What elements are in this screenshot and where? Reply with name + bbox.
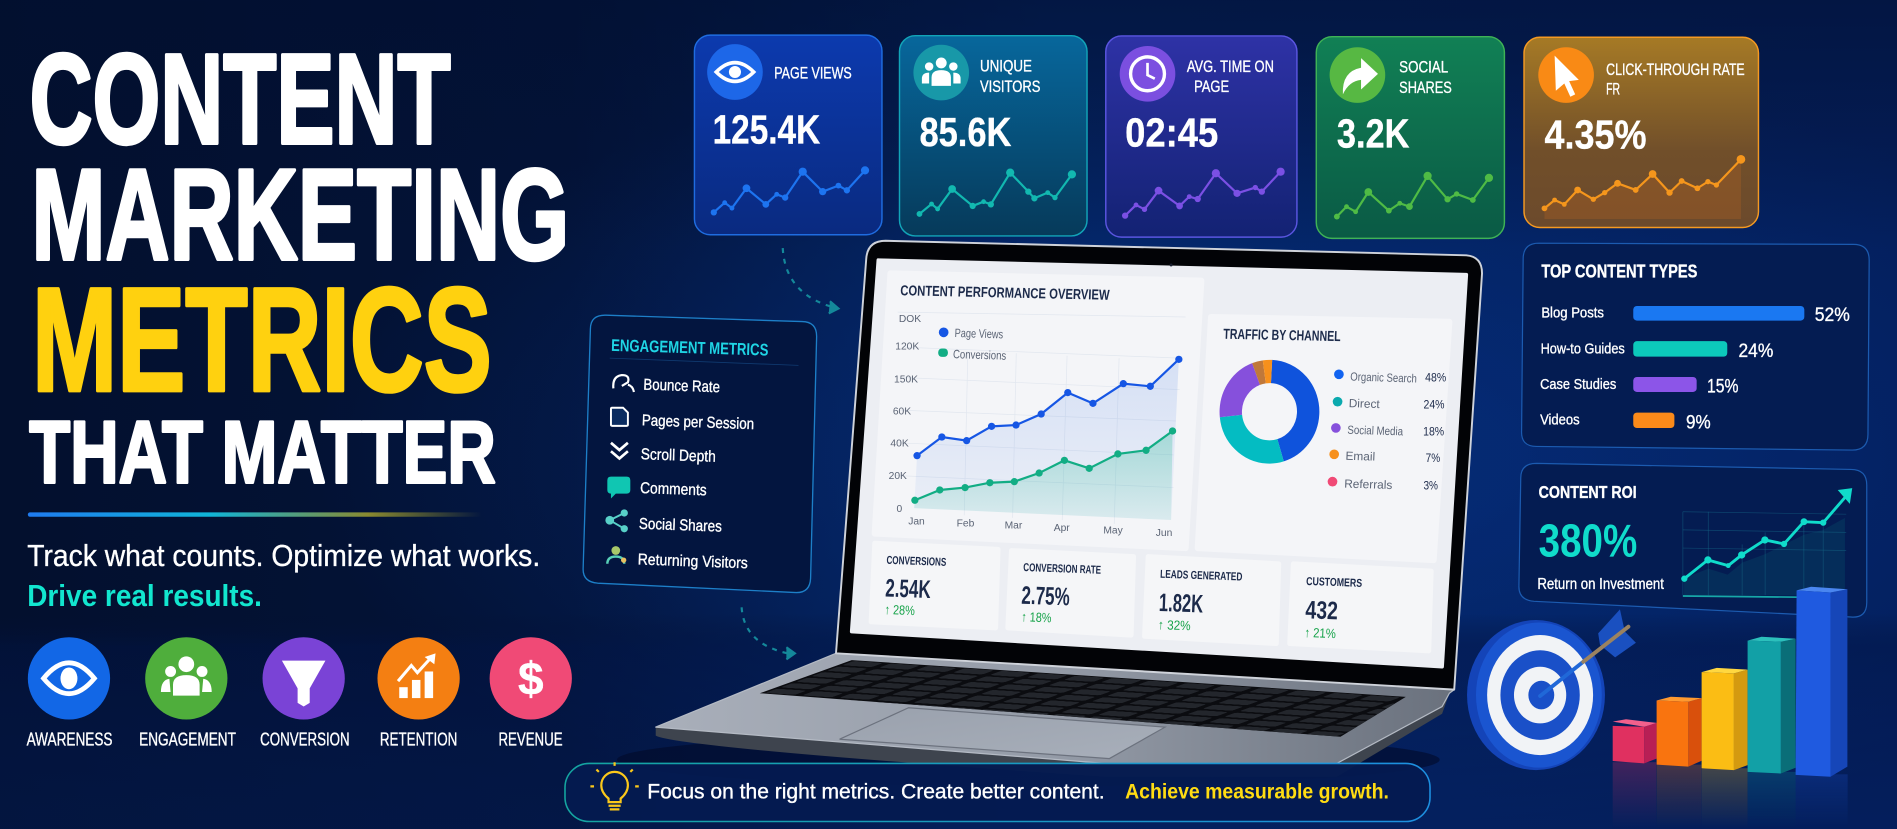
- chart axis labels: 20K: [889, 471, 907, 482]
- KPI card: page views: [694, 35, 882, 235]
- chart axis labels: 40K: [890, 438, 909, 449]
- KPI card: click-through rate: CLICK-THROUGH RATE: [1606, 61, 1745, 79]
- stat card: conversions: ↑ 28%: [884, 602, 915, 618]
- row: bounce rate: [613, 375, 720, 396]
- stat card: conversion rate: [1008, 550, 1134, 635]
- donut legend: 7%: [1426, 451, 1441, 465]
- tagline: [27, 540, 540, 613]
- bar: videos: 9%: [1686, 411, 1711, 433]
- arrow: engagement to laptop: [742, 607, 795, 659]
- bar: case studies: [1540, 376, 1739, 398]
- KPI card: average time on page: PAGE: [1194, 78, 1229, 96]
- bar: orange: [1657, 697, 1702, 767]
- bar: blog posts: Blog Posts: [1541, 305, 1604, 322]
- bar: blue: [1796, 587, 1847, 777]
- chart axis labels: 60K: [893, 406, 911, 417]
- donut legend: Email: [1345, 449, 1375, 464]
- stat card: conversion rate: ↑ 18%: [1021, 609, 1052, 625]
- row: scroll depth: [611, 443, 716, 466]
- title: METRICS: [32, 258, 492, 423]
- KPI card: average time on page: 02:45: [1125, 109, 1218, 155]
- donut legend: Direct: [1348, 396, 1381, 411]
- donut legend: 3%: [1423, 478, 1438, 492]
- funnel stage: conversion: [260, 637, 350, 749]
- row: social shares: Social Shares: [639, 516, 722, 536]
- line: page views: [913, 356, 1182, 459]
- row: scroll depth: Scroll Depth: [640, 446, 716, 466]
- KPI card: click-through rate: FR: [1606, 80, 1620, 98]
- row: returning visitors: [607, 546, 748, 572]
- donut legend: Social Media: [1347, 423, 1404, 438]
- chart axis labels: Feb: [957, 518, 975, 529]
- stat card: conversions: CONVERSIONS: [886, 555, 947, 569]
- funnel stage: retention: RETENTION: [380, 729, 457, 749]
- bar: blog posts: 52%: [1815, 304, 1850, 326]
- KPI card: click-through rate: [1524, 37, 1758, 227]
- panel: top content types: [1522, 243, 1869, 450]
- stat card: leads generated: ↑ 32%: [1158, 617, 1191, 633]
- panel: content ROI: Return on Investment: [1537, 576, 1665, 593]
- laptop lid: [836, 241, 1482, 690]
- stat card: leads generated: LEADS GENERATED: [1160, 569, 1243, 584]
- row: bounce rate: Bounce Rate: [643, 377, 720, 396]
- panel: engagement metrics: [583, 315, 817, 593]
- target with arrow: [1467, 609, 1636, 770]
- gradient divider: [28, 512, 482, 517]
- funnel stage: revenue: REVENUE: [498, 729, 563, 749]
- arrow: KPI to laptop: [783, 248, 838, 313]
- KPI card: page views: 125.4K: [713, 106, 820, 152]
- 3D bar chart: [1613, 587, 1848, 829]
- donut legend: 24%: [1423, 397, 1445, 411]
- chart axis labels: 150K: [894, 374, 918, 385]
- donut legend: 48%: [1425, 371, 1447, 385]
- KPI card: unique visitors: 85.6K: [919, 109, 1012, 155]
- tagline: Drive real results.: [27, 580, 262, 613]
- KPI card: average time on page: AVG. TIME ON: [1187, 58, 1274, 76]
- row: returning visitors: Returning Visitors: [637, 551, 748, 572]
- bar: how-to guides: [1541, 340, 1773, 362]
- chart legend: Page Views: [954, 326, 1003, 341]
- bar: blog posts: [1541, 304, 1850, 326]
- title: THAT MATTER: [29, 402, 496, 501]
- row: pages per session: Pages per Session: [642, 412, 754, 433]
- chart axis labels: Apr: [1054, 523, 1070, 534]
- panel: content ROI: [1519, 463, 1867, 617]
- chart legend: [938, 326, 1007, 363]
- banner: Focus on the right metrics. Create better content.: [647, 780, 1105, 803]
- funnel stage: engagement: [139, 637, 236, 749]
- funnel stage: engagement: ENGAGEMENT: [139, 729, 236, 749]
- funnel stage: awareness: AWARENESS: [27, 729, 113, 749]
- chart axis labels: Mar: [1005, 521, 1023, 532]
- KPI card: unique visitors: [900, 36, 1087, 236]
- KPI card: social shares: 3.2K: [1337, 111, 1410, 157]
- KPI card: social shares: SOCIAL: [1399, 59, 1448, 77]
- stat card: leads generated: 1.82K: [1158, 589, 1204, 619]
- panel: content ROI: 380%: [1539, 515, 1637, 567]
- stat card: leads generated: [1144, 557, 1279, 644]
- tagline: Track what counts. Optimize what works.: [27, 540, 540, 573]
- stat card: customers: CUSTOMERS: [1306, 576, 1363, 590]
- dart: [1540, 609, 1636, 696]
- funnel stage: revenue: [490, 637, 572, 749]
- KPI card: unique visitors: UNIQUE: [980, 57, 1032, 75]
- funnel stage: conversion: CONVERSION: [260, 729, 350, 749]
- stat card: customers: ↑ 21%: [1304, 625, 1336, 641]
- row: social shares: [605, 509, 722, 536]
- KPI card: page views: PAGE VIEWS: [774, 65, 852, 83]
- panel: content ROI: CONTENT ROI: [1539, 482, 1637, 502]
- title: MARKETING: [31, 143, 569, 287]
- title: [29, 28, 569, 501]
- stat card: customers: [1290, 564, 1431, 651]
- bar: case studies: Case Studies: [1540, 376, 1617, 393]
- bar: videos: [1540, 411, 1711, 433]
- icon: light bulb: [590, 762, 639, 809]
- title: CONTENT: [30, 28, 451, 171]
- KPI card: click-through rate: 4.35%: [1544, 111, 1647, 157]
- chart axis labels: 0: [896, 504, 902, 515]
- KPI card: unique visitors: VISITORS: [980, 78, 1041, 96]
- row: comments: [607, 477, 707, 499]
- bar: case studies: 15%: [1707, 376, 1739, 398]
- stat card: conversion rate: CONVERSION RATE: [1023, 562, 1102, 577]
- stat card: conversions: 2.54K: [885, 574, 932, 604]
- bar: teal: [1748, 637, 1796, 773]
- banner: Achieve measurable growth.: [1125, 780, 1389, 803]
- stat card: conversions: [871, 543, 998, 628]
- chart axis labels: DOK: [899, 314, 921, 325]
- bar: how-to guides: 24%: [1739, 340, 1773, 362]
- panel: traffic by channel: TRAFFIC BY CHANNEL: [1223, 327, 1341, 345]
- chart axis labels: May: [1103, 526, 1124, 537]
- bar: how-to guides: How-to Guides: [1541, 340, 1625, 357]
- funnel stage: retention: [377, 637, 460, 749]
- row: comments: Comments: [640, 480, 707, 499]
- chart axis labels: Jan: [908, 516, 925, 527]
- laptop screen: [852, 260, 1466, 667]
- donut chart: [1229, 369, 1310, 454]
- panel: engagement metrics: ENGAGEMENT METRICS: [611, 336, 769, 360]
- KPI card: average time on page: [1106, 36, 1297, 237]
- panel: traffic by channel: [1198, 317, 1449, 560]
- line: conversions: [911, 427, 1176, 504]
- donut legend: [1328, 369, 1447, 492]
- row: pages per session: [611, 408, 754, 433]
- KPI card: social shares: [1316, 37, 1504, 238]
- donut legend: 18%: [1423, 425, 1445, 439]
- donut legend: Referrals: [1344, 477, 1393, 492]
- ROI chart: [1681, 488, 1852, 598]
- funnel stage: revenue: $: [518, 652, 544, 704]
- KPI card: social shares: SHARES: [1399, 79, 1452, 97]
- laptop base: [656, 653, 1454, 777]
- panel: content performance overview: CONTENT PERFORMANCE OVERVIEW: [900, 283, 1110, 304]
- stat card: conversion rate: 2.75%: [1021, 582, 1070, 611]
- chart legend: Conversions: [953, 347, 1007, 363]
- donut legend: Organic Search: [1350, 370, 1417, 385]
- banner: [565, 762, 1430, 821]
- laptop: [617, 241, 1482, 786]
- bar: pink: [1613, 719, 1657, 763]
- funnel stage: awareness: [27, 637, 113, 749]
- bar: videos: Videos: [1540, 412, 1580, 429]
- bar: yellow: [1702, 668, 1748, 770]
- panel: content performance overview: [875, 273, 1201, 548]
- chart axis labels: Jun: [1156, 528, 1173, 539]
- panel: top content types: TOP CONTENT TYPES: [1541, 262, 1697, 282]
- chart axis labels: [889, 314, 1173, 539]
- stat card: customers: 432: [1305, 596, 1338, 625]
- chart axis labels: 120K: [895, 342, 919, 353]
